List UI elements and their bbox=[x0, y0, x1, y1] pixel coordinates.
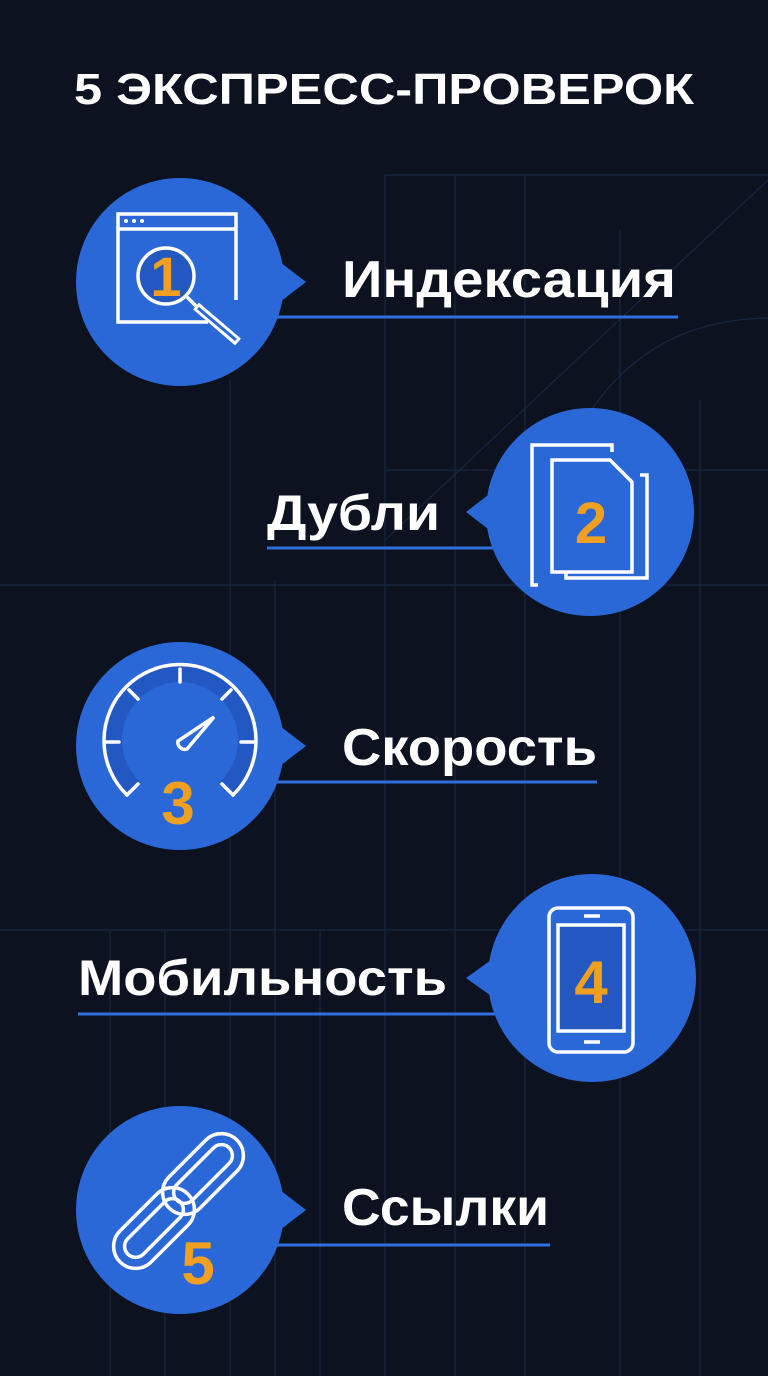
title: 5 ЭКСПРЕСС-ПРОВЕРОК bbox=[74, 65, 694, 114]
icon: documents bbox=[532, 445, 647, 585]
item 5: Ссылки: 5 bbox=[181, 1230, 215, 1297]
item 3: Скорость: 3 bbox=[161, 770, 195, 837]
item 5: Ссылки: Ссылки bbox=[342, 1179, 549, 1237]
item 1: Индексация bbox=[76, 178, 678, 386]
item 2: Дубли bbox=[267, 408, 694, 616]
icon: browser with magnifier bbox=[118, 214, 238, 342]
label: Индексация bbox=[342, 251, 676, 309]
item 1: Индексация: 1 bbox=[150, 245, 182, 308]
item 4: Мобильность bbox=[78, 874, 696, 1082]
icon: chain links bbox=[105, 1125, 252, 1277]
icon: speedometer bbox=[104, 665, 256, 795]
item 2: Дубли: 2 bbox=[575, 491, 607, 556]
icon: phone bbox=[549, 908, 633, 1052]
item 5: Ссылки bbox=[76, 1106, 550, 1314]
item 3: Скорость: Скорость bbox=[342, 719, 597, 777]
item 3: Скорость bbox=[76, 642, 597, 850]
item 2: Дубли: Дубли bbox=[267, 485, 440, 541]
item 4: Мобильность: Мобильность bbox=[78, 950, 447, 1006]
item 4: Мобильность: 4 bbox=[574, 949, 608, 1016]
